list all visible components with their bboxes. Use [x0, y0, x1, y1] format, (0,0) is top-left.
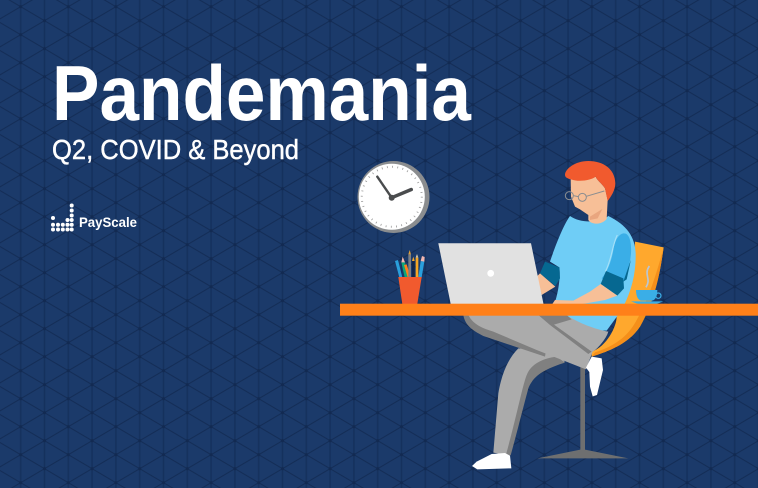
stool	[537, 363, 628, 458]
legs	[463, 315, 608, 469]
icon: logo dots	[51, 204, 74, 232]
icon: wall clock	[358, 161, 430, 233]
shoe: front	[472, 453, 511, 469]
thigh	[468, 315, 608, 369]
subtitle: Q2, COVID & Beyond	[52, 134, 299, 165]
icon: coffee cup	[631, 266, 663, 305]
pencils	[395, 250, 425, 277]
head	[565, 161, 615, 224]
chair	[592, 242, 664, 357]
cuffs	[601, 271, 624, 296]
laptop	[438, 243, 544, 304]
cup	[398, 277, 422, 304]
hands	[537, 273, 555, 295]
shirt	[550, 216, 636, 331]
back leg	[493, 348, 565, 455]
title: Pandemania	[52, 49, 472, 137]
torso	[537, 216, 636, 331]
hair	[565, 161, 615, 201]
face	[571, 177, 608, 224]
glasses	[565, 191, 604, 201]
thigh shadow	[463, 315, 547, 357]
icon: pencil cup	[395, 250, 425, 304]
person	[463, 161, 636, 469]
logo: PayScale	[51, 204, 137, 232]
logo wordmark: PayScale	[79, 214, 137, 230]
sleeve	[602, 233, 631, 290]
foot: raised	[586, 357, 603, 396]
desk	[340, 304, 758, 316]
